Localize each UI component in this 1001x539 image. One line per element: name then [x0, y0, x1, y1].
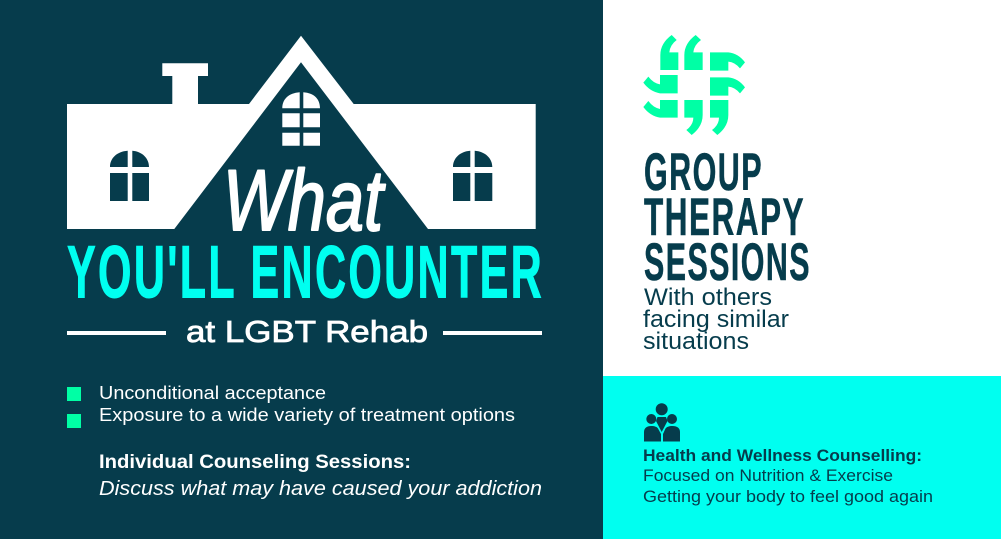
icon: right window [453, 151, 492, 201]
text block: health and wellness counselling: Getting your body to feel good again [643, 487, 933, 506]
icon: left window [110, 151, 149, 201]
list: bullet points: Exposure to a wide variety of treatment options [99, 405, 515, 425]
heading: group therapy sessions: GROUP [644, 143, 763, 202]
text block: with others facing similar situations: With others [644, 284, 772, 311]
subheading: at LGBT Rehab with rules: at LGBT Rehab [186, 314, 428, 349]
text block: with others facing similar situations [643, 284, 789, 355]
panel: bottom right cyan [603, 376, 1001, 539]
text block: individual counseling sessions: Individual Counseling Sessions: [99, 452, 411, 473]
panel: left dark background [0, 0, 603, 539]
text block: health and wellness counselling [643, 446, 933, 506]
text block: with others facing similar situations: situations [643, 328, 749, 355]
text block: individual counseling sessions: Discuss what may have caused your addiction [99, 478, 542, 500]
icon: group of people [644, 403, 680, 442]
heading: group therapy sessions [644, 143, 811, 292]
heading: What script word: What [223, 153, 385, 249]
text block: individual counseling sessions [99, 452, 542, 500]
list: bullet points [67, 383, 515, 428]
text block: health and wellness counselling: Focused on Nutrition & Exercise [643, 466, 893, 485]
list: bullet points: Unconditional acceptance [99, 383, 326, 403]
panel: top right white [603, 0, 1001, 376]
heading: group therapy sessions: THERAPY [644, 188, 805, 247]
icon: house illustration [67, 36, 536, 229]
text block: with others facing similar situations: facing similar [643, 306, 789, 333]
heading: You'll Encounter: YOU'LL ENCOUNTER [67, 230, 544, 314]
heading: group therapy sessions: SESSIONS [644, 233, 811, 292]
icon: attic window [282, 92, 320, 146]
icon: green quotation marks [643, 35, 745, 135]
subheading: at LGBT Rehab with rules [67, 314, 542, 349]
text block: health and wellness counselling: Health and Wellness Counselling: [643, 446, 922, 465]
